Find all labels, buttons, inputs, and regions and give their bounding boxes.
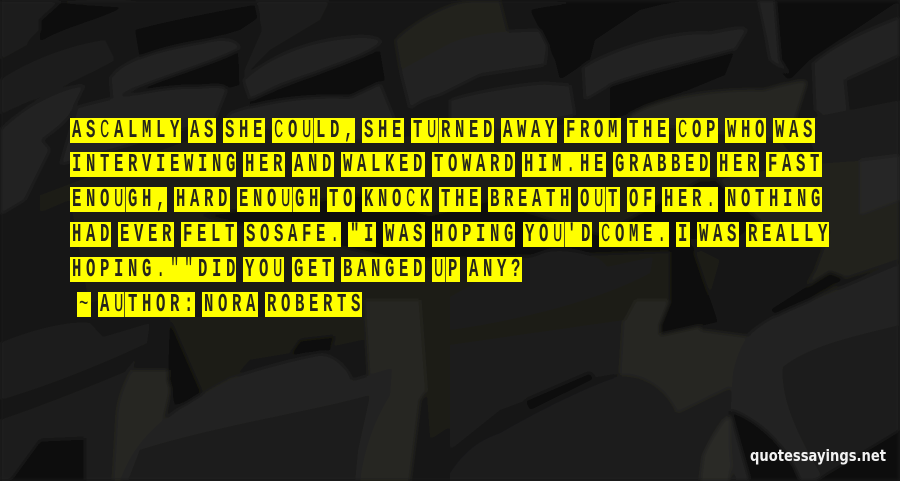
quote text block: yellow highlighted words [70,118,829,317]
quote line 5 [70,257,522,282]
quote line 3 [70,187,822,212]
centre-right upper chair [420,280,500,440]
right lower chair [730,263,900,481]
lower left chair [0,322,150,481]
upper rows [0,0,140,60]
quote line 4 [70,222,829,247]
author attribution [77,292,362,317]
text-level band [0,136,50,215]
mid chair backs [167,317,363,400]
centre lower chair [450,375,735,481]
quote line 2 [70,152,822,177]
floor patches [100,240,790,481]
center bottom chair [120,354,392,481]
quote line 1 [70,118,815,143]
